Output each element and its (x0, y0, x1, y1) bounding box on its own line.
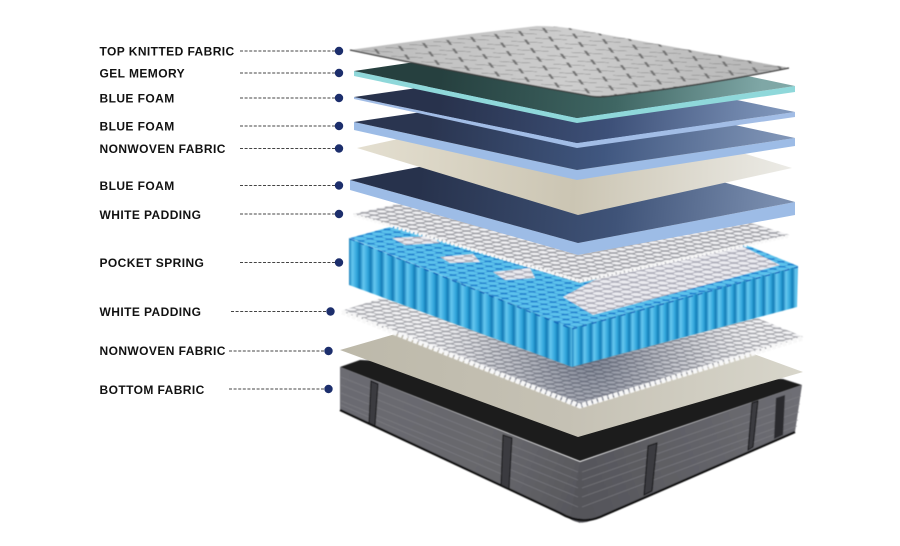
label: blue foam 3: BLUE FOAM (100, 179, 175, 193)
label: nonwoven fabric 2: NONWOVEN FABRIC (100, 344, 226, 358)
gel memory foam (354, 39, 795, 123)
white padding 2 (341, 240, 804, 408)
spring cell patches (392, 236, 780, 315)
blue foam 2 (354, 90, 795, 180)
label: top knitted fabric (100, 44, 343, 58)
label: nonwoven fabric 2 (100, 344, 333, 358)
label: blue foam 1 (100, 92, 343, 106)
blue foam 1 (354, 66, 795, 148)
label: pocket spring (100, 256, 343, 270)
label: nonwoven fabric 1: NONWOVEN FABRIC (100, 142, 226, 156)
label: nonwoven fabric 1 (100, 142, 343, 156)
nonwoven fabric 1 (357, 101, 792, 215)
label: blue foam 3 (100, 179, 343, 193)
tag (774, 395, 785, 439)
label: white padding 2: WHITE PADDING (100, 305, 201, 319)
label: white padding 1: WHITE PADDING (100, 208, 201, 222)
label: white padding 1 (100, 208, 343, 222)
pocket spring (349, 176, 798, 367)
label: bottom fabric (100, 383, 333, 397)
top knitted fabric (350, 26, 789, 97)
label: pocket spring: POCKET SPRING (100, 256, 204, 270)
blue foam 3 (350, 139, 795, 255)
label: top knitted fabric: TOP KNITTED FABRIC (100, 44, 235, 58)
label: white padding 2 (100, 305, 335, 319)
label: gel memory: GEL MEMORY (100, 66, 185, 80)
label: blue foam 1: BLUE FOAM (100, 92, 175, 106)
white padding 1 (353, 166, 790, 283)
label: blue foam 2 (100, 120, 343, 134)
labels and leader lines (100, 44, 343, 397)
label: bottom fabric: BOTTOM FABRIC (100, 383, 205, 397)
mattress base: bottom fabric (340, 360, 802, 523)
nonwoven fabric 2 (340, 285, 803, 437)
handles (369, 381, 758, 495)
label: blue foam 2: BLUE FOAM (100, 120, 175, 134)
label: gel memory (100, 66, 343, 80)
